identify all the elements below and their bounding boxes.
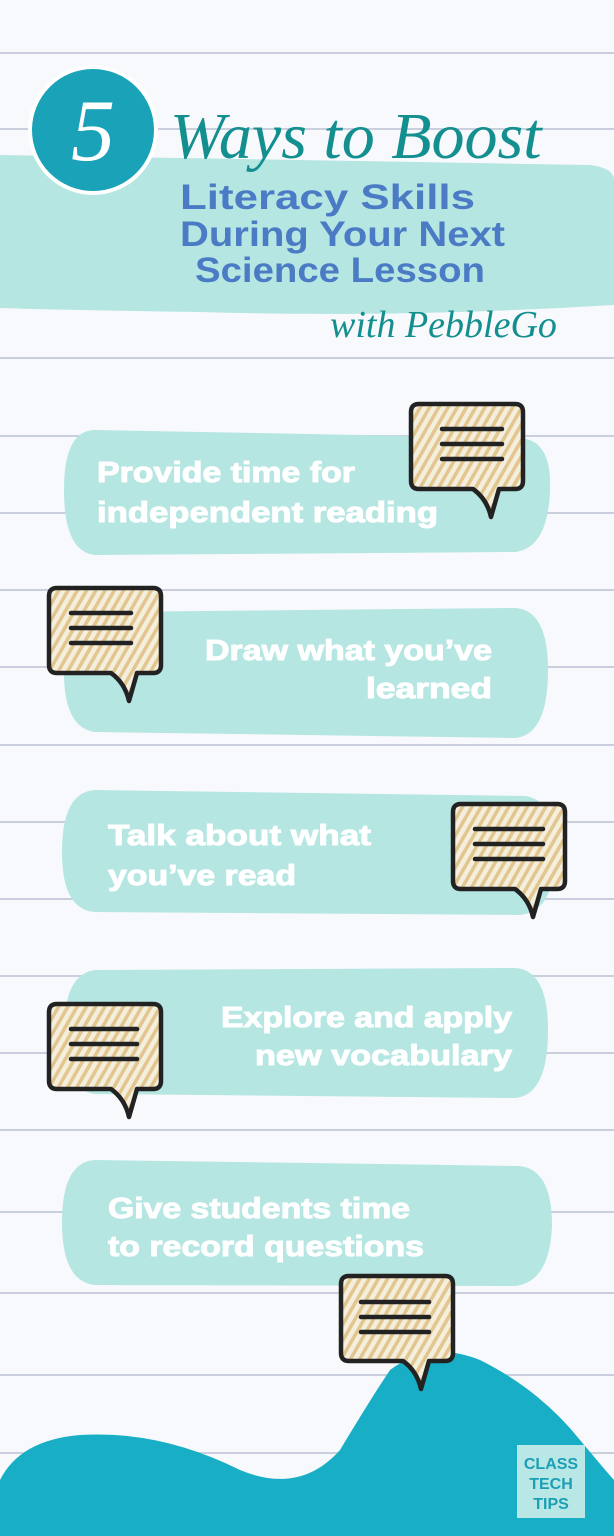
panel 3 — [62, 790, 555, 915]
badge: number 5: 5 — [71, 83, 115, 180]
tagline: with PebbleGo: with PebbleGo — [330, 304, 557, 346]
panel 3: Talk about what — [108, 820, 371, 852]
panel 2: learned — [366, 673, 492, 705]
panel 3: you’ve read — [108, 860, 296, 892]
panel 5: Give students time — [108, 1193, 410, 1225]
logo: Class Tech Tips — [517, 1445, 585, 1518]
subtitle: Science Lesson — [195, 251, 485, 290]
logo: Class Tech Tips: CLASS — [524, 1456, 578, 1473]
bottom wave — [0, 1352, 614, 1536]
icon: speech bubble 4 — [49, 1004, 161, 1117]
subtitle: During Your Next — [180, 215, 505, 254]
icon: speech bubble 3 — [453, 804, 565, 917]
logo: Class Tech Tips: TECH — [529, 1476, 573, 1493]
subtitle: Literacy Skills — [180, 178, 475, 217]
header band — [0, 155, 614, 314]
panel 5: to record questions — [108, 1231, 424, 1263]
panel 4: Explore and apply — [221, 1002, 512, 1034]
icon: speech bubble 5 — [341, 1276, 453, 1389]
panel 1: Provide time for — [97, 457, 355, 489]
title: Ways to Boost: Ways to Boost — [170, 100, 543, 173]
panel 2 — [64, 608, 548, 738]
badge: number 5 — [30, 67, 156, 193]
panel 4 — [64, 968, 548, 1098]
panel 2: Draw what you’ve — [205, 635, 492, 667]
panel 5 — [62, 1160, 552, 1286]
panel 4: new vocabulary — [255, 1040, 512, 1072]
panel 1 — [64, 430, 550, 555]
icon: speech bubble 2 — [49, 588, 161, 701]
panel 1: independent reading — [97, 497, 438, 529]
logo: Class Tech Tips: TIPS — [533, 1496, 569, 1513]
icon: speech bubble 1 — [411, 404, 523, 517]
